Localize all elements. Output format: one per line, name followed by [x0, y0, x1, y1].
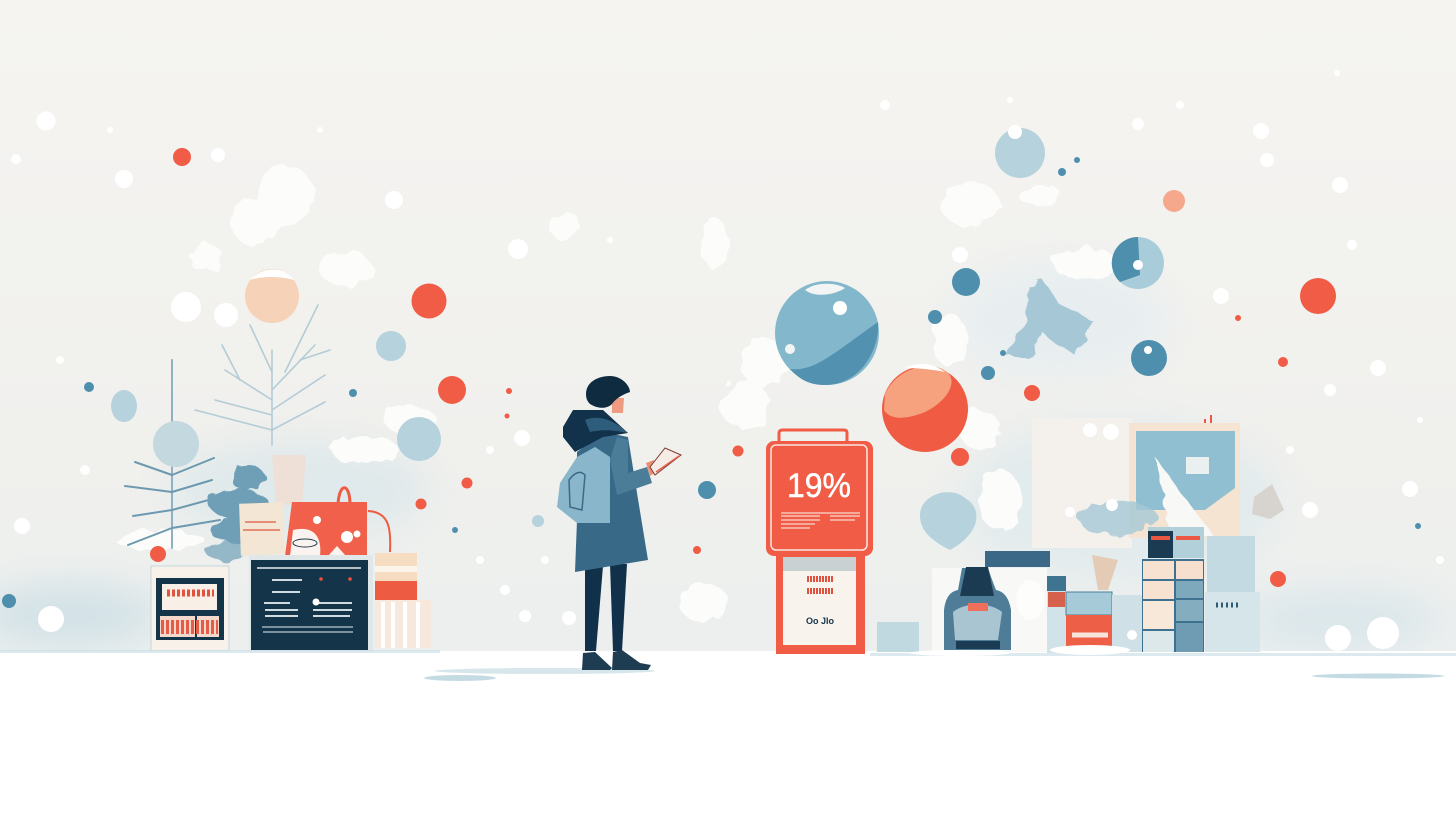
- snow on collage: [910, 423, 1137, 656]
- person: [557, 376, 681, 670]
- right pale boxes: [1205, 536, 1260, 652]
- ground shadows: [0, 650, 1456, 681]
- left card: [151, 566, 229, 651]
- tree: pine blue: [206, 464, 270, 561]
- ground: [0, 651, 1456, 816]
- top card: [1148, 527, 1204, 558]
- sign panel: [766, 441, 873, 556]
- abstract blue figure: [1006, 282, 1092, 360]
- sign base paper: [783, 557, 856, 645]
- pale column: [1112, 595, 1142, 652]
- tree: bare white-blue: [195, 305, 330, 445]
- white splashes: [115, 165, 1218, 622]
- sign small text: [781, 513, 860, 528]
- peach-red sphere: [882, 364, 968, 452]
- side stack: [877, 622, 919, 652]
- arm: [610, 437, 652, 495]
- head: [586, 376, 630, 413]
- dark panel: [249, 555, 373, 651]
- red handbag: [285, 488, 390, 556]
- hood: [563, 410, 628, 452]
- stacked boxes: [375, 553, 431, 648]
- right collage: [877, 415, 1284, 653]
- peach sphere: [245, 269, 299, 323]
- sign base paper: Oo JIo: [806, 616, 834, 626]
- dark strip: [985, 551, 1050, 567]
- sign base post: [776, 556, 865, 654]
- blue sphere: [775, 281, 879, 385]
- blue and red cards: [1066, 592, 1112, 650]
- sign inner border: [771, 445, 867, 550]
- coat: [575, 432, 648, 572]
- tan scrap: [1092, 555, 1118, 590]
- white sheet: [932, 568, 1047, 652]
- left shelf items: [151, 488, 431, 651]
- hood highlight: [585, 418, 628, 433]
- hand and book: [646, 448, 681, 476]
- pale blue washes: [0, 260, 1440, 650]
- coloured dots: [2, 128, 1421, 608]
- percentage figure: 19%: [787, 467, 851, 505]
- background: [0, 0, 1456, 652]
- paper bag: [239, 502, 285, 556]
- legs: [585, 564, 627, 651]
- snow flecks: [11, 70, 1444, 651]
- small column: [1047, 576, 1066, 653]
- drawers stack: [1142, 559, 1204, 652]
- pale circle on tree: [153, 421, 199, 467]
- backpack: [557, 447, 610, 523]
- left trees: [125, 305, 330, 561]
- big floating spheres: [245, 269, 1092, 550]
- signboard: [766, 430, 873, 654]
- grey scrap: [1252, 484, 1284, 519]
- peach wash: [272, 455, 306, 505]
- car: [944, 567, 1011, 650]
- tree: pine pale: [125, 360, 220, 548]
- blue splash: [1078, 501, 1158, 535]
- large blue framed poster: [1129, 415, 1240, 538]
- shoes: [582, 650, 651, 670]
- two-tone blue ball: [1112, 237, 1164, 289]
- pale backdrop sheet: [1032, 418, 1132, 548]
- sign handle: [779, 430, 847, 441]
- pale blue heart-like blob: [920, 492, 976, 550]
